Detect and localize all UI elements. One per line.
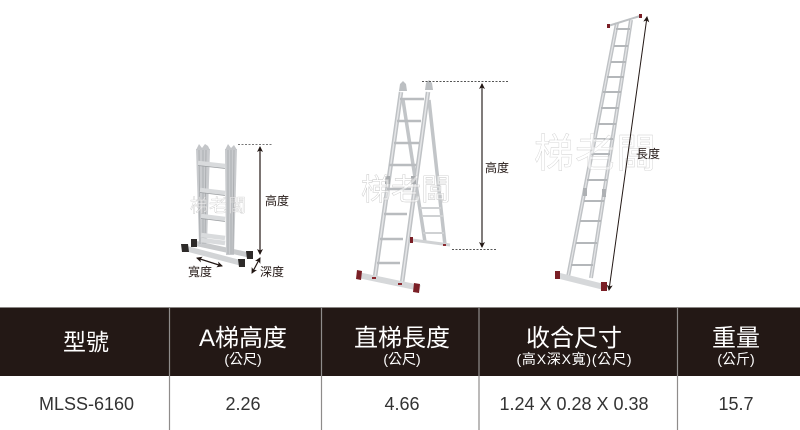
small folded ladder [181,144,253,267]
cell: straight length: 4.66 [384,394,420,414]
width arrow [197,258,222,266]
cell: weight: 15.7 [718,394,754,414]
table top rule [0,307,800,308]
header: weight [712,325,760,367]
label: 深度: 深度 [260,264,284,279]
header: A ladder height [199,325,287,367]
header: straight ladder length: (公尺) [383,351,421,367]
header: A ladder height: (公尺) [224,351,262,367]
header: folded size: (高X深X寬)(公尺) [516,351,632,367]
label: 長度: 長度 [636,146,660,161]
table header background [0,307,800,376]
header: folded size [516,325,632,367]
header: model: 型號 [63,329,109,355]
cell: model number: MLSS-6160 [39,394,134,414]
cell: folded size: 1.24 X 0.28 X 0.38 [499,394,649,414]
header: straight ladder length: 直梯長度 [354,325,450,352]
watermark large: 梯老闆 [534,132,656,176]
A-frame height dimension [422,82,508,250]
watermark medium: 梯老闆 [361,174,451,207]
header: A ladder height: A梯高度 [199,325,287,352]
label: 寬度: 寬度 [188,264,212,279]
straight ladder length arrow [609,17,647,290]
header: weight: (公斤) [717,351,755,367]
label: 高度: 高度 [485,160,509,175]
A-frame ladder [356,80,450,293]
cell: A height: 2.26 [225,394,261,414]
header: folded size: 收合尺寸 [526,325,622,352]
small ladder height arrow [238,144,273,254]
table [0,307,800,430]
header: weight: 重量 [712,325,760,352]
column dividers [170,307,678,430]
straight ladder [555,14,642,291]
header: straight ladder length [354,325,450,367]
depth arrow [252,258,260,273]
watermark small: 梯老闆 [190,196,246,216]
label: 高度: 高度 [265,193,289,208]
